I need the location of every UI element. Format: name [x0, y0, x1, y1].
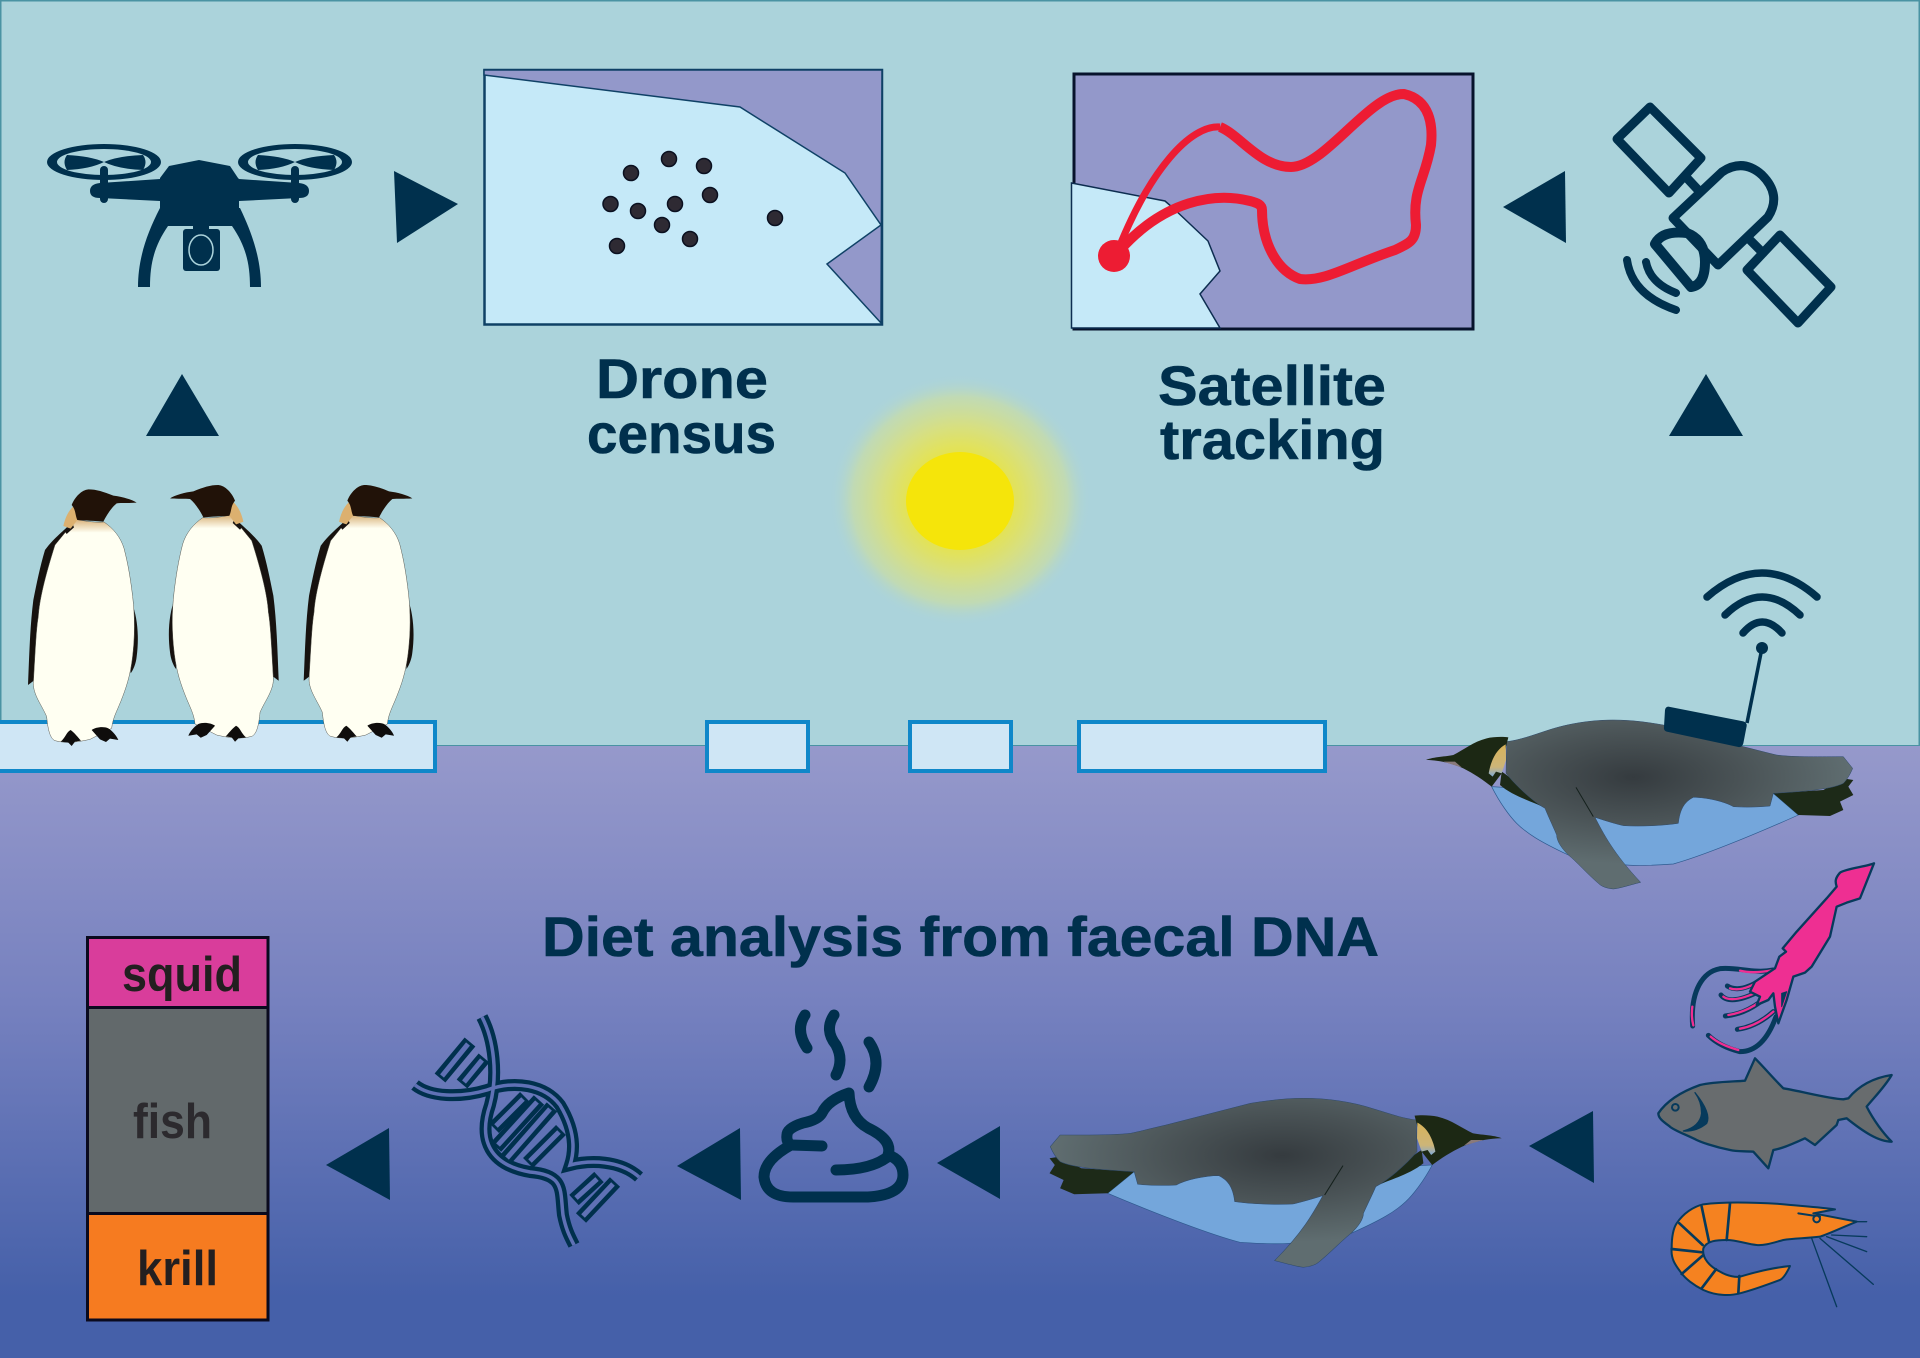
bar segment: krill — [88, 1214, 268, 1320]
satellite track line — [1098, 94, 1432, 279]
label: squid: squid — [122, 948, 242, 1002]
bar segment: squid — [88, 938, 268, 1008]
icon: standing penguin 1 — [28, 489, 138, 746]
arrow: drone to census — [394, 171, 458, 243]
bar segment: fish — [88, 1008, 268, 1214]
label: fish: fish — [133, 1095, 212, 1149]
heading: drone census — [587, 347, 776, 465]
panel: sea background — [0, 746, 1920, 1358]
heading: satellite tracking: tracking — [1160, 408, 1385, 471]
arrow: prey to penguin — [1529, 1111, 1594, 1183]
icon: krill — [1672, 1203, 1873, 1307]
icon: DNA helix — [415, 1017, 639, 1245]
arrow: penguin tag to satellite — [1669, 374, 1743, 436]
panel: sky background — [1, 1, 1919, 746]
icon: fish — [1658, 1058, 1892, 1168]
arrow: faeces to DNA — [677, 1128, 741, 1200]
heading: satellite tracking: Satellite — [1158, 354, 1386, 417]
arrow: penguins to drone — [146, 374, 219, 436]
icon: standing penguin 2 — [169, 485, 279, 742]
icon: swimming penguin feeding — [1050, 1098, 1502, 1267]
icon: squid — [1692, 863, 1874, 1052]
label: krill: krill — [137, 1242, 218, 1296]
icon: drone — [47, 144, 352, 287]
panel: satellite tracking map — [1072, 74, 1473, 329]
icon: satellite — [1617, 107, 1831, 323]
heading: diet analysis: Diet analysis from faecal DNA — [542, 905, 1379, 968]
panel: drone census map — [484, 70, 882, 324]
icon: faeces — [764, 1015, 903, 1197]
heading: drone census: census — [587, 402, 776, 465]
icon: swimming penguin with tag — [1426, 707, 1853, 889]
penguin colony dots — [603, 152, 782, 254]
arrow: satellite to map — [1503, 171, 1566, 243]
chart: diet composition bar — [88, 938, 268, 1320]
arrow: DNA to diet bar — [326, 1128, 390, 1200]
arrow: penguin to faeces — [937, 1126, 1000, 1199]
heading: satellite tracking — [1158, 354, 1386, 471]
icon: tag transmitter with wifi signal — [1707, 573, 1817, 723]
heading: drone census: Drone — [596, 347, 768, 410]
icon: standing penguin 3 — [304, 485, 414, 742]
panel: ice floes — [0, 722, 1325, 771]
icon: sun — [829, 374, 1091, 626]
